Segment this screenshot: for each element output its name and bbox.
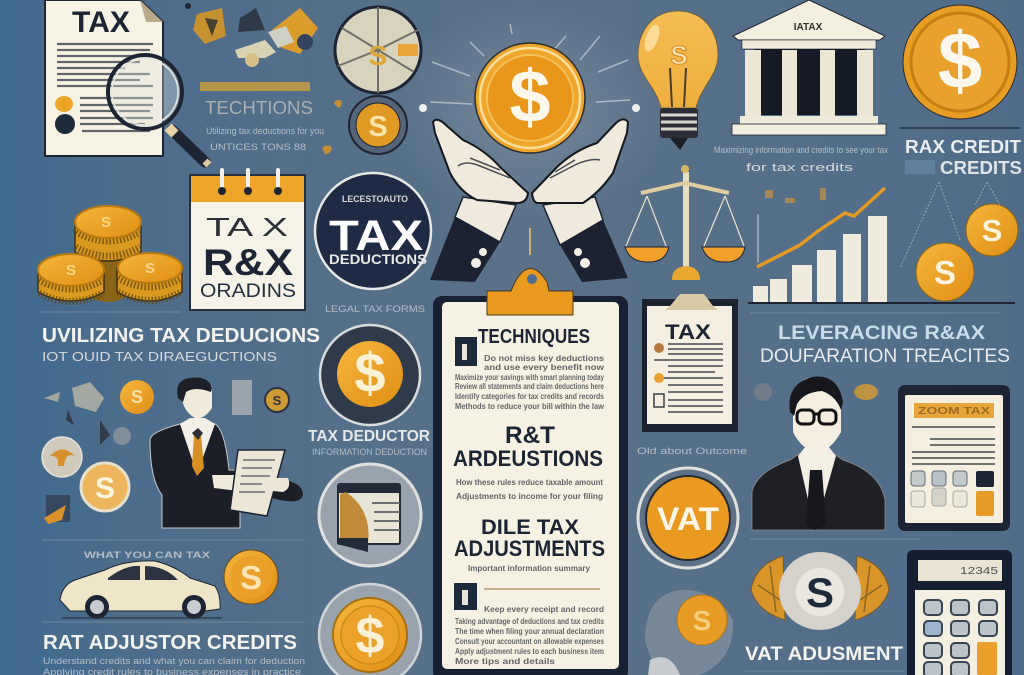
right coin mark: S: [145, 260, 155, 277]
icon: bullet square two: [454, 583, 477, 610]
S mark: S: [368, 111, 388, 143]
bar chart with trend line: [748, 188, 1015, 303]
S mark: S: [240, 559, 262, 596]
bullet icons: [654, 343, 664, 407]
icon: small coin bullet: [55, 96, 73, 112]
document text lines: [57, 44, 153, 131]
paragraph two: How these rules reduce taxable amount: [456, 478, 603, 487]
heading: dile tax: DILE TAX: [481, 516, 579, 539]
icon: silver seal with laurels: [751, 552, 889, 630]
icon: car: [60, 561, 222, 619]
calendar rings: [218, 170, 282, 195]
panel: calendar: [190, 170, 305, 310]
paragraph three: Consult your accountant on allowable expenses: [455, 637, 604, 646]
panel: tax document with magnifier: [45, 0, 209, 165]
panel: calculator: [907, 550, 1012, 675]
paragraph three: The time when filing your annual declaration: [455, 627, 604, 636]
top coin mark: S: [101, 214, 111, 231]
S mark: S: [273, 393, 282, 408]
paragraph one: Review all statements and claim deductions here: [455, 382, 604, 391]
icon: coin in pale circle: [319, 584, 421, 675]
keys: [924, 600, 997, 675]
icon: segmented tax wheel: [335, 7, 421, 93]
paragraph three: Taking advantage of deductions and tax credits: [455, 617, 604, 626]
S mark: S: [934, 254, 956, 291]
heading: leveraging r&ax: [760, 323, 1010, 367]
bulb S: S: [670, 40, 688, 70]
gold banner: [200, 82, 310, 91]
panel: central clipboard: [433, 268, 628, 675]
paragraph one: Identify categories for tax credits and records: [455, 392, 604, 401]
calendar word: ORADINS: ORADINS: [200, 281, 296, 302]
paragraph one: Do not miss key deductions: [484, 354, 605, 363]
icon: document in grey circle: [319, 464, 421, 566]
caption: for tax credits: [714, 145, 888, 174]
tablet label: ZOOM TAX: [918, 406, 990, 417]
heading: adjustments: ADJUSTMENTS: [454, 536, 605, 561]
icon: mushroom circle: [42, 437, 82, 477]
VAT text: VAT: [657, 501, 719, 537]
heading: VAT adjustment: VAT ADUSMENT: [745, 644, 903, 665]
second caption line: for tax credits: [746, 162, 854, 174]
panel: car and credits: [43, 550, 305, 675]
badge TAX: TAX: [329, 212, 423, 260]
decorative orange dots: [322, 100, 342, 154]
heading: TAX: TAX: [72, 6, 130, 39]
caption heading: TECHTIONS: [205, 98, 313, 118]
left coin mark: S: [66, 262, 76, 279]
caption line two: UNTICES TONS 88: [210, 142, 306, 152]
bulb base: [660, 108, 698, 150]
calendar word: R&X: R&X: [203, 242, 293, 283]
bank pediment label: IATAX: [794, 22, 823, 33]
S mark: S: [693, 605, 711, 636]
dollar: $: [354, 341, 386, 404]
credits line: CREDITS: [940, 158, 1022, 178]
wheel dollar sign: S: [369, 40, 387, 71]
panel: top collage icons and caption: [185, 3, 342, 154]
lines: [654, 344, 723, 412]
dollar: $: [509, 55, 551, 138]
icon: bullet square one: [455, 337, 477, 366]
paragraph three: [455, 605, 604, 666]
label detail: INFORMATION DEDUCTION: [312, 447, 427, 457]
label: tax deduction: TAX DEDUCTOR: [308, 428, 430, 445]
paragraph three: Apply adjustment rules to each business item: [455, 647, 604, 656]
small tag: [905, 160, 935, 174]
icon: magnifying glass: [108, 55, 209, 165]
heading: techniques: TECHNIQUES: [478, 326, 590, 348]
icon: right hand: [532, 119, 628, 282]
heading: adjustions: ARDEUSTIONS: [453, 446, 603, 471]
top label: WHAT YOU CAN TAX: [84, 550, 210, 560]
scattered icons: [44, 380, 252, 524]
icon: gold coin stacks: [38, 206, 182, 302]
lines: [912, 427, 995, 464]
heading: R&T: R&T: [505, 422, 555, 449]
icon: document in hand: [230, 450, 289, 516]
bars: [753, 216, 887, 302]
badge DEDUCTIONS: DEDUCTIONS: [329, 251, 427, 267]
badge: VAT: [638, 468, 738, 568]
rax credit line: RAX CREDIT: [905, 137, 1021, 157]
panel: small tax clipboard: [642, 294, 738, 432]
paragraph three: Keep every receipt and record: [484, 605, 604, 614]
badge: tax deductions: [315, 173, 431, 289]
caption: for tax credits: Maximizing information and credits to see your tax: [714, 145, 888, 155]
subheading: DOUFARATION TREACITES: [760, 346, 1010, 367]
panel: tablet with document and keys: [898, 385, 1010, 531]
S mark: S: [95, 472, 115, 505]
subheading: IOT OUID TAX DIRAEGUCTIONS: [42, 349, 277, 364]
S mark: S: [131, 387, 143, 407]
icon: light bulb: [638, 11, 718, 150]
paragraph two: [456, 478, 603, 501]
dollar: $: [938, 16, 982, 105]
S mark: S: [982, 213, 1002, 248]
icon: left hand: [430, 120, 528, 282]
heading: rax credit: [900, 128, 1022, 178]
orange marks: [765, 188, 826, 203]
trend line: [757, 188, 885, 267]
small caption: Important information summary: [468, 564, 591, 573]
icon: pale-rim coin: [81, 463, 129, 511]
paragraph one: and use every benefit now: [484, 363, 605, 372]
orange key: [977, 642, 997, 675]
heading: utilizing tax deductions: UVILIZING TAX DEDUCIONS: [42, 325, 320, 347]
keys: [911, 471, 994, 516]
dollar: $: [356, 607, 385, 665]
icon: small gold pin: [529, 228, 531, 255]
glasses: [797, 410, 836, 424]
TAX: TAX: [665, 321, 711, 344]
calendar word: TAX: TA X: [206, 212, 288, 242]
figure: man with glasses: [752, 377, 885, 530]
paragraph three: More tips and details: [455, 657, 556, 666]
caption below badge: LEGAL TAX FORMS: [325, 304, 425, 314]
paragraph one: Methods to reduce your bill within the law: [455, 402, 605, 411]
panel: consultant with document: [42, 377, 303, 528]
icon: large gold coin: [903, 5, 1017, 119]
caption under small clipboard: Old about Outcome: [637, 446, 747, 456]
clipboard clip: [487, 268, 573, 315]
small ornament icons: [754, 383, 878, 401]
figure: man in suit: [150, 377, 303, 528]
seal S: S: [806, 569, 834, 616]
icon collage: [185, 3, 318, 67]
icon: dark bullet: [55, 114, 75, 134]
icon: small dark coin: [265, 388, 289, 412]
icon: bank building: [732, 0, 886, 135]
paragraph one: [455, 354, 605, 411]
icon: coin in dark circle: [320, 325, 420, 425]
icon: coin on pale dome: [645, 590, 733, 675]
icon: central coin with rays: [419, 24, 640, 153]
paragraph one: Maximize your savings with smart planning today: [455, 373, 604, 382]
icon: balance scale: [625, 165, 745, 280]
caption line one: Utilizing tax deductions for you: [206, 126, 324, 136]
icons: hanging coins: [900, 182, 1018, 301]
icon: orange coin: [120, 380, 154, 414]
heading: rat adjustor credits: RAT ADJUSTOR CREDITS: [43, 632, 297, 654]
description line one: Understand credits and what you can claim for deduction: [43, 656, 305, 666]
badge top line: LECESTOAUTO: [342, 194, 408, 205]
paragraph two: Adjustments to income for your filing: [456, 492, 603, 501]
divider: [484, 588, 600, 590]
heading: utilizing tax deductions: [42, 325, 320, 364]
icon: car coin: [224, 550, 278, 604]
label: tax deduction: [308, 428, 430, 457]
heading: leveraging r&ax: LEVERACING R&AX: [778, 323, 985, 344]
axis: [757, 214, 759, 262]
icon: small dark rim coin: [349, 96, 407, 154]
calculator display: 12345: [960, 566, 999, 577]
